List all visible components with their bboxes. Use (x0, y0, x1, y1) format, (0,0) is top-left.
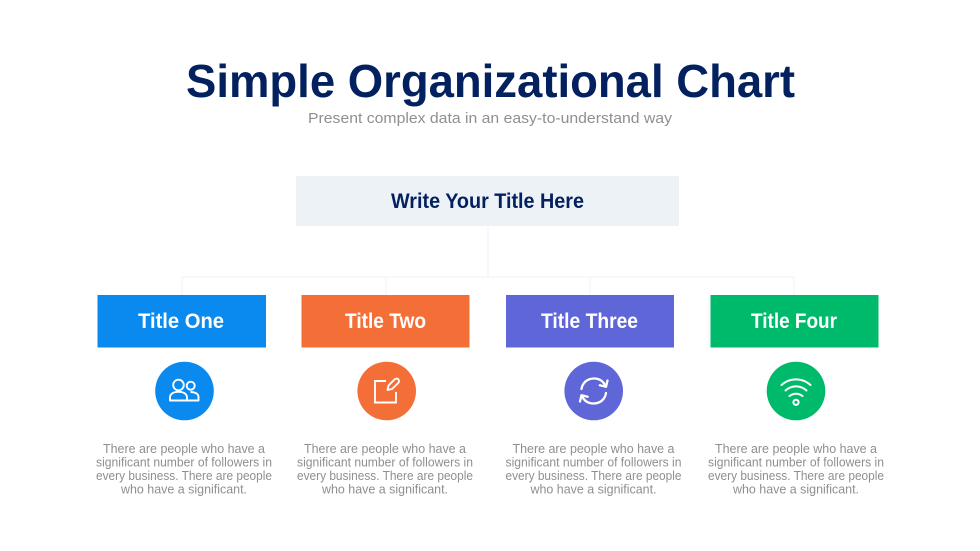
title one header (98, 295, 266, 348)
description four: There are people who have a (715, 442, 877, 456)
top box: main title (296, 176, 679, 226)
subtitle: Present complex data in an easy-to-understand way (308, 110, 673, 127)
title two header: Title Two (345, 310, 426, 333)
column: title two (297, 295, 473, 496)
description one: There are people who have a (103, 442, 265, 456)
title three header (506, 295, 674, 348)
icon: sync (564, 362, 623, 420)
title two header (302, 295, 470, 348)
connector lines (182, 226, 794, 295)
title four header: Title Four (751, 310, 837, 333)
description three: significant number of followers in (506, 456, 682, 470)
description three: who have a significant. (530, 482, 656, 496)
description four (708, 442, 884, 496)
icon: people (155, 362, 214, 420)
column: title one (96, 295, 272, 496)
description two: significant number of followers in (297, 456, 473, 470)
description four: who have a significant. (732, 482, 859, 496)
description one (96, 442, 272, 496)
description one: every business. There are people (96, 469, 272, 483)
description four: every business. There are people (708, 469, 884, 483)
description two: every business. There are people (297, 469, 473, 483)
description three: every business. There are people (506, 469, 682, 483)
description one: who have a significant. (120, 482, 247, 496)
column: title three (506, 295, 682, 496)
title three header: Title Three (541, 310, 638, 333)
description four: significant number of followers in (708, 456, 884, 470)
description one: significant number of followers in (96, 456, 272, 470)
icon: edit (357, 362, 416, 420)
description two (297, 442, 473, 496)
title four header (710, 295, 878, 348)
description three (506, 442, 682, 496)
description three: There are people who have a (512, 442, 675, 456)
description two: who have a significant. (321, 482, 448, 496)
column: title four (708, 295, 884, 496)
title: Simple Organizational Chart (186, 55, 795, 107)
description two: There are people who have a (304, 442, 466, 456)
title one header: Title One (138, 310, 224, 333)
icon: wifi (767, 362, 825, 420)
top box: main title: Write Your Title Here (391, 190, 584, 213)
